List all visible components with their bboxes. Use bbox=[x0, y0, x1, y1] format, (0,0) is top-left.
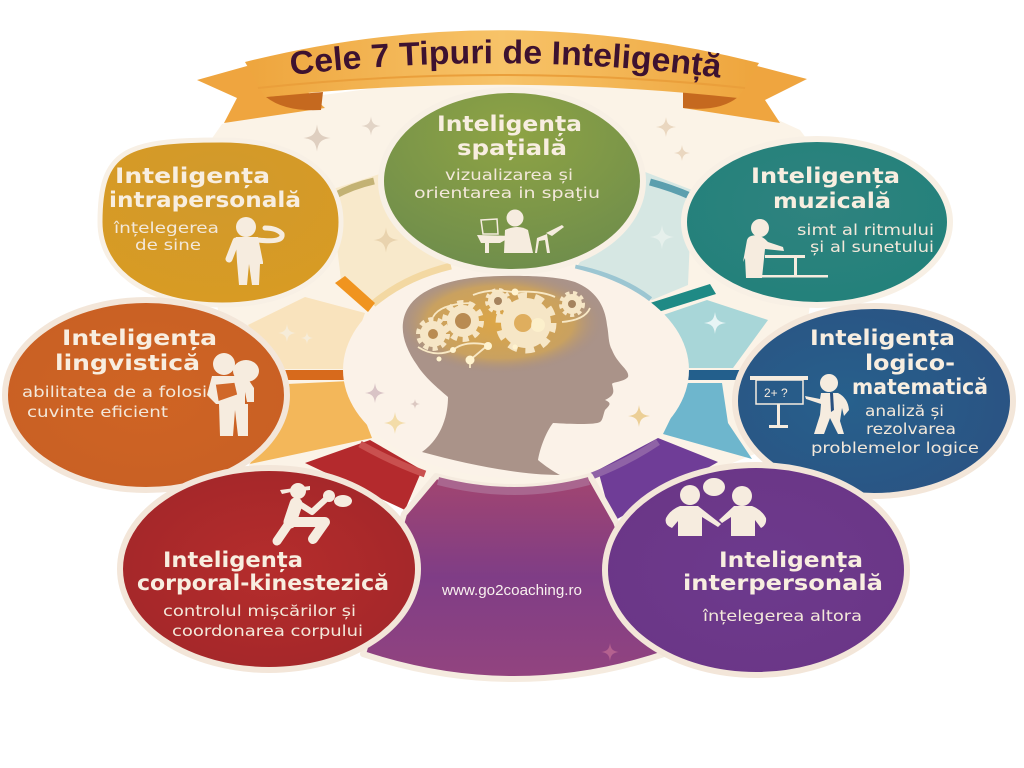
description: coordonarea corpului bbox=[172, 622, 363, 640]
heading: Inteligența bbox=[751, 164, 900, 189]
central stars bbox=[365, 383, 650, 434]
disc bbox=[684, 139, 950, 305]
heading: Inteligența bbox=[163, 548, 303, 573]
panel: linguistic intelligence bbox=[5, 300, 287, 490]
segment: red bbox=[305, 440, 422, 510]
segment: red rim band bbox=[360, 444, 425, 474]
panel: bodily-kinesthetic intelligence bbox=[120, 468, 418, 670]
heading: corporal-kinestezică bbox=[137, 571, 389, 596]
icon: teacher at board: 2+ ? bbox=[764, 386, 788, 400]
central circle with head bbox=[343, 262, 689, 478]
description: orientarea in spaţiu bbox=[414, 184, 600, 202]
heading: muzicală bbox=[773, 189, 891, 214]
segment: pale peach left bbox=[248, 297, 365, 369]
description: vizualizarea și bbox=[445, 166, 573, 184]
icon: person reading with speech bubble bbox=[207, 353, 259, 436]
panel: logical-mathematical intelligence bbox=[735, 306, 1013, 496]
description: abilitatea de a folosi bbox=[22, 383, 207, 401]
gears bbox=[418, 290, 583, 350]
disc bbox=[5, 300, 287, 490]
ribbon left tail bbox=[197, 66, 325, 123]
segment: pale yellow upper left bbox=[330, 170, 452, 302]
heading: matematică bbox=[852, 375, 988, 400]
segment: light orange lower left bbox=[250, 381, 372, 464]
ribbon right fold bbox=[683, 92, 738, 109]
sparks bbox=[436, 288, 545, 364]
segment: blue spoke right bbox=[680, 370, 740, 380]
segment: orange spoke upper left bbox=[335, 276, 375, 312]
heading: Inteligența bbox=[62, 326, 217, 351]
description: analiză și bbox=[865, 402, 944, 420]
panel: spatial intelligence bbox=[381, 90, 643, 272]
description: înțelegerea bbox=[113, 219, 219, 237]
icon: teacher at board bbox=[750, 374, 849, 434]
description: problemelor logice bbox=[811, 439, 979, 457]
ribbon right tail bbox=[683, 66, 807, 123]
segment: magenta rim band bbox=[438, 481, 589, 491]
segment: blue arc accent bbox=[650, 182, 690, 196]
title: Cele 7 Tipuri de Inteligență bbox=[291, 39, 720, 82]
disc bbox=[120, 468, 418, 670]
segment: pale blue band bbox=[575, 268, 650, 300]
radial wheel segments bbox=[248, 170, 768, 679]
icon: athlete bbox=[277, 483, 352, 541]
description: de sine bbox=[135, 236, 201, 254]
disc bbox=[100, 140, 341, 305]
icon: reflective person bbox=[229, 217, 282, 285]
segment: orange spoke left bbox=[278, 370, 350, 380]
description: controlul mișcărilor și bbox=[163, 602, 356, 620]
segment: teal spoke upper right bbox=[650, 284, 716, 313]
heading: interpersonală bbox=[683, 571, 883, 596]
ribbon band bbox=[245, 30, 759, 98]
heading: spațială bbox=[457, 136, 567, 161]
segment: purple rim band bbox=[592, 442, 658, 476]
description: înțelegerea altora bbox=[702, 607, 862, 625]
heading: logico- bbox=[865, 351, 955, 376]
icon: person at keyboard bbox=[743, 219, 828, 278]
ribbon left fold bbox=[266, 92, 323, 110]
heading: Inteligența bbox=[810, 326, 955, 351]
disc bbox=[735, 306, 1013, 496]
central disc bbox=[343, 262, 689, 478]
head silhouette bbox=[403, 276, 628, 475]
icon: two people talking bbox=[666, 478, 766, 536]
segment: pale orange band bbox=[373, 266, 451, 304]
panel: intrapersonal intelligence bbox=[100, 140, 341, 305]
segment: pale teal upper right bbox=[578, 170, 692, 300]
disc bbox=[605, 465, 907, 675]
cream background fan bbox=[190, 70, 830, 500]
segment: blue lower right bbox=[663, 383, 752, 459]
heading: Inteligența bbox=[115, 164, 270, 189]
description: rezolvarea bbox=[866, 420, 956, 438]
description: și al sunetului bbox=[810, 238, 934, 256]
segment: magenta bottom bbox=[363, 476, 664, 679]
ribbon edge bbox=[258, 75, 745, 88]
description: simt al ritmului bbox=[797, 221, 934, 239]
neural lines bbox=[418, 291, 590, 368]
brain glow bbox=[408, 276, 592, 368]
segment: tan arc accent bbox=[334, 181, 374, 196]
segment: pale blue right upper bbox=[663, 300, 768, 368]
icon: person at desk with plane bbox=[477, 210, 564, 253]
heading: Inteligența bbox=[437, 112, 582, 137]
panel: musical intelligence bbox=[684, 139, 950, 305]
disc bbox=[381, 90, 643, 272]
heading: Inteligența bbox=[719, 548, 863, 573]
description: cuvinte eficient bbox=[27, 403, 168, 421]
website label: www.go2coaching.ro bbox=[441, 582, 582, 599]
heading: intrapersonală bbox=[109, 188, 301, 213]
panel: interpersonal intelligence bbox=[605, 465, 907, 675]
segment: purple bbox=[598, 438, 718, 522]
decorative stars bbox=[278, 116, 726, 661]
heading: lingvistică bbox=[55, 351, 200, 376]
title ribbon bbox=[197, 30, 807, 123]
